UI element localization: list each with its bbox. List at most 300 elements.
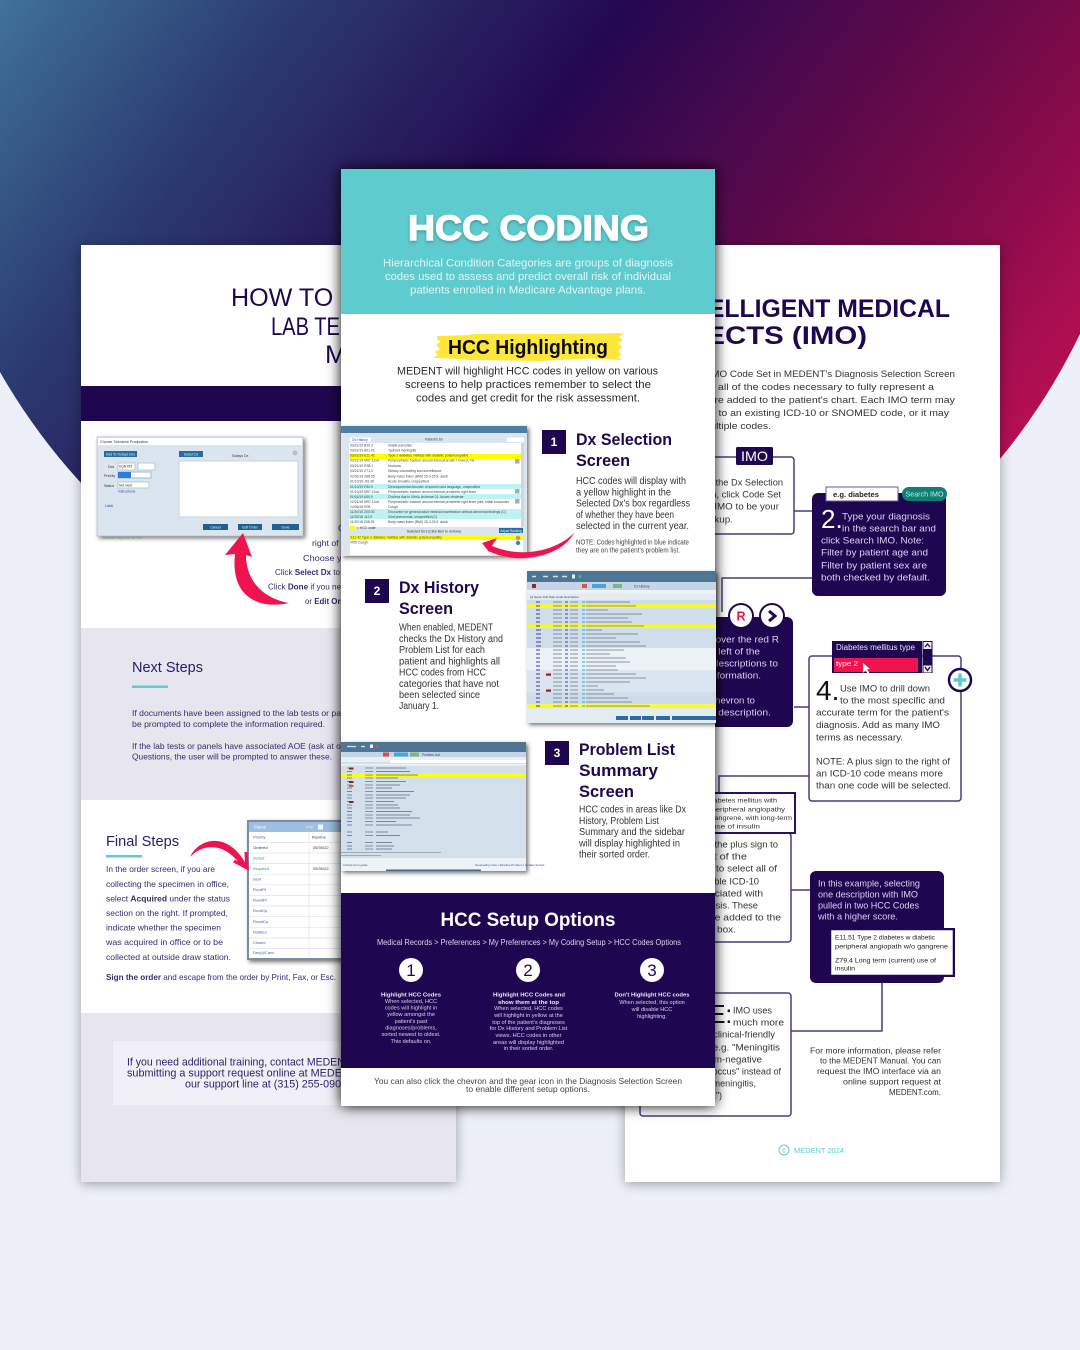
heading: HCC highlighting with yellow brush [433,333,624,361]
example callout: pulled in two HCC Codes [818,900,919,912]
option 1: When selected, HCC [385,999,437,1005]
heading: dx selection screen: Dx Selection [576,431,672,449]
screenshot: diagnosis selection: 01/10/19 J01.90 [350,480,374,484]
note box: NOTE: [660,999,732,1029]
option 1 [381,958,441,1045]
header description [383,258,674,296]
screenshot: order dialog: Done [281,525,290,529]
screenshot: diagnosis selection: Typhoid meningitis [388,448,416,452]
heading: problem list summary screen: Screen [579,783,634,801]
option 3: When selected, this option [619,1000,685,1006]
step number 3: 3 [554,746,561,760]
setup footnote: You can also click the chevron and the gear icon in the Diagnosis Selection Screen [374,1076,682,1086]
heading: dx selection screen [576,431,672,470]
highlighting description [397,366,658,404]
final steps text: collecting the specimen in office, [106,879,229,889]
step 3: description box [640,604,793,727]
step 5: plus sign box: codes will be added to the [661,912,781,924]
screenshot: dx history: [x] Name ICD Date Code Description [530,595,579,599]
option 2: top of the patient's diagnoses [492,1020,565,1026]
title: how to order lab tests [231,284,435,369]
search IMO button: Search IMO [906,492,944,498]
IMO label [736,447,773,465]
dx selection note: NOTE: Codes highlighted in blue indicate [576,540,689,546]
screenshot: status table: Sent [253,876,262,882]
step number 1: 1 [551,435,558,449]
screenshot: order dialog [97,437,303,540]
next steps text [132,708,407,762]
header description: patients enrolled in Medicare Advantage plans. [410,284,646,296]
screenshot: status table: RvwdPt [253,898,268,902]
heading: dx history screen: Dx History [399,579,480,597]
section: HCC setup options [341,893,715,1068]
screenshot: diagnosis selection: = HCC code [357,526,376,530]
screenshot: status table: RcvdPt [253,887,267,892]
HCC code result box: E11.51 Type 2 diabetes w diabetic [835,934,936,942]
option 2: in their sorted order. [504,1046,554,1052]
option 2: will highlight in yellow at the [493,1013,563,1019]
screenshot: status table: Priority [253,834,265,840]
setup footnote [374,1076,682,1094]
screenshot: diagnosis selection: Adjust Ranking [500,529,522,533]
problem list text: their sorted order. [579,850,650,860]
screenshot: order dialog: DQN #15 [119,464,133,468]
dx history text: Problem List for each [399,645,485,656]
heading: problem list summary screen [579,741,675,801]
note box: terms (e.g. "Meningitis [682,1042,780,1054]
problem list text: HCC codes in areas like Dx [579,804,686,816]
screenshot: order dialog: Edit Order [242,525,259,529]
selected description: current use of insulin [684,824,760,830]
screenshot: order dialog: Cancel [210,525,221,529]
screenshot: problem list summary [341,742,545,871]
problem list text: will display highlighted in [578,838,680,850]
screenshot: status table: Status [254,824,266,830]
heading: next steps: Next Steps [132,659,203,676]
next steps text: Questions, the user will be prompted to answer these. [132,752,332,762]
screenshot: dx history [527,571,716,723]
dx selection note [576,540,689,554]
option 1: This defaults on. [390,1039,432,1045]
title: how to order lab tests: MEDENT [325,341,435,369]
screenshot: diagnosis selection: Periprosthetic fracture around internal prosthetic right knee joint, initial encounter [388,500,510,504]
more information text: to the MEDENT Manual. You can [820,1056,941,1066]
screenshot: diagnosis selection: 11/20/18 Z00.00 [350,510,375,514]
screenshot: problem list summary: Generating Care | Resolve Problem | Update Sorted [475,863,545,867]
more information text: MEDENT.com. [889,1088,941,1097]
panel: intelligent medical objects page [625,245,1000,1182]
step 1 text: lookup. [701,514,733,526]
heading: dx history screen [399,579,480,618]
step 1 text: and select IMO to be your [667,502,780,512]
option 1: 1 [406,961,416,980]
option 2: When selected, HCC codes [494,1006,563,1012]
final steps text: section on the right. If prompted, [106,908,228,918]
step 2: search box: both checked by default. [821,572,930,584]
icon: red R: R [736,610,746,624]
dx selection text: a yellow highlight in the [576,488,672,498]
screenshot: status table: Routine [312,834,327,840]
screenshot: diagnosis selection: Body mass index (BMI) 25.0-25.9, adult [388,474,448,478]
screenshot: diagnosis selection: 03/21/19 Z71.3 [350,469,373,473]
screenshot: diagnosis selection: 01/10/19 M97.11xA [350,490,380,494]
navy band [81,386,456,421]
step 3: description box: 3. Hover over the red R [675,634,779,646]
screenshot: order dialog: Instructions [118,490,136,494]
screenshot: status table: 05/30/22 [313,866,329,871]
screenshot: problem list summary: Problem List [422,753,440,757]
step 1: code set box [640,447,794,534]
intro text: Use the IMO Code Set in MEDENT's Diagnosis Selection Screen [672,369,955,380]
screenshot: status table: Dec(t)/Canc [253,950,274,955]
screenshot: diagnosis selection: Patient's Dx [425,438,443,442]
example callout: one description with IMO [818,890,918,900]
screenshot: diagnosis selection: Cholera due to Vibrio cholerae 01, biovar cholerae [388,495,464,499]
heading: setup options: HCC Setup Options [440,909,616,931]
final steps text: was acquired in office or to be [105,937,223,947]
instructions text fragment: Click Done if you need to [268,582,359,592]
dx selection text: selected in the current year. [576,521,689,532]
heading: final steps: Final Steps [106,833,179,850]
screenshot: order dialog: Add To Todays Dxs [106,452,135,456]
selected description: Type 2 diabetes mellitus with [684,798,777,804]
section: next steps [81,628,456,800]
step 5: plus sign box: the right of the [677,852,747,862]
step 5: plus sign box: the diagnosis. These [672,900,758,912]
arrow: to selected dx row [482,533,574,558]
option 2: areas will display highlighted [493,1040,564,1046]
copyright footer: c [782,1148,786,1154]
instructions text fragment: Click Select Dx to add. [275,567,358,577]
screenshot: diagnosis selection: R05 Cough [350,540,368,544]
dx history text: January 1. [399,701,439,712]
step 4: drill down box: Use IMO to drill down [840,684,930,694]
highlighting description: screens to help practices remember to select the [405,379,651,391]
screenshot: diagnosis selection: 12/21/18 M97.11xA [350,500,380,504]
title: intelligent medical objects: INTELLIGENT MEDICAL [668,295,950,323]
screenshot: order dialog: Lab# [105,504,113,508]
option 1: patient's past [395,1019,428,1025]
example callout: with a higher score. [817,912,898,922]
menu path: Medical Records > Preferences > My Preferences > My Coding Setup > HCC Codes Options [377,938,681,947]
screenshot: order dialog: Choose Dept for Int TIG [102,536,142,540]
intro text: match to an existing ICD-10 or SNOMED code, or it may [687,408,949,419]
connector lines [719,511,882,1031]
note box: due to gram-negative [670,1054,762,1066]
instructions text fragment: right of the screen. [312,538,384,548]
copyright footer [779,1145,844,1155]
arrow: pointing to dialog buttons [225,533,289,605]
dx history text [399,622,503,712]
screenshot: diagnosis selection: Cough [388,505,398,509]
title: intelligent medical objects [645,295,950,350]
note box: diplococcus" instead of [689,1066,781,1078]
screenshot: diagnosis selection: Periprosthetic fracture around internal prosthetic right knee [388,490,476,494]
option 1: sorted newest to oldest. [381,1032,441,1038]
dx history text: checks the Dx History and [399,634,503,645]
example callout: In this example, selecting [818,878,920,890]
option 3: will disable HCC [631,1007,672,1013]
step 4: drill down box: diagnosis. Add as many IMO [816,720,940,731]
highlighting description: codes and get credit for the risk assessment. [416,392,640,404]
screenshot: diagnosis selection: 03/21/19 B19.2 [350,444,373,448]
screenshot: status table: Ordered [253,845,268,850]
more information text [810,1046,942,1097]
screenshot: diagnosis selection: Dietary counseling and surveillance [388,469,441,473]
selected description [640,793,795,833]
screenshot: order dialog: Dxs [108,465,114,469]
step number 2 [365,579,389,603]
dropdown: diabetes mellitus type [832,641,932,674]
final steps text: In the order screen, if you are [106,864,215,874]
step number 3 [545,741,569,765]
selected description: diabetic peripheral angiopathy [683,806,786,814]
option 2 [490,958,568,1052]
step 4: drill down box: an ICD-10 code means more [816,768,943,780]
note box: more clinical-friendly [689,1030,775,1040]
header description: codes used to assess and predict overall risk of individual [385,271,671,283]
screenshot: diagnosis selection: 11/20/18 J12.9 [350,515,372,519]
next steps text: If the lab tests or panels have associated AOE (ask at order entry) [132,741,380,751]
problem list text: Summary and the sidebar [579,827,686,838]
setup footnote: to enable different setup options. [466,1084,590,1094]
screenshot: diagnosis selection: Developmental disorder of speech and language, unspecified [388,485,480,489]
screenshot: diagnosis selection: 03/21/19 R35.1 [350,464,373,468]
step 2: search box [812,487,947,596]
problem list text: History, Problem List [579,816,659,827]
copyright footer: MEDENT 2024 [794,1146,844,1155]
heading: dx selection screen: Screen [576,452,630,470]
screenshot: status table: Acquired [253,866,269,871]
option 2: 2 [523,961,533,980]
screenshot: diagnosis selection: 12/06/18 R05 [350,505,370,509]
note box: much more [733,1018,784,1028]
screenshot: order dialog: Select Dx [184,452,199,456]
final steps text: indicate whether the specimen [106,922,221,932]
screenshot: diagnosis selection: 03/21/19 M97.11xA [350,459,380,463]
screenshot: status table: RcvdCp [253,908,268,913]
dropdown: diabetes mellitus type: type 2 [836,659,858,668]
dx selection text: of whether they have been [576,510,674,521]
instructions text fragment [268,523,384,606]
panel: lab test ordering page [81,245,456,1182]
step 5: plus sign box: the applicable ICD-10 [669,876,759,888]
step 3: description box: Click chevron to [687,696,755,706]
arrow: pointing to acquired status [190,841,247,868]
screenshot: diagnosis selection: 11/20/18 Z68.25 [350,520,375,524]
dx history text: HCC codes from HCC [399,668,486,678]
icon: plus sign [949,669,971,691]
header description: Hierarchical Condition Categories are groups of diagnosis [383,258,674,270]
screenshot: diagnosis selection: 01/01/19 A00.0 [350,495,373,499]
option 1: diagnoses/problems, [385,1026,437,1032]
option 3 [614,958,690,1020]
more information text: request the IMO interface via an [817,1067,941,1076]
option 3: highlighting. [637,1014,667,1020]
screenshot: order dialog: Todays Dx [232,454,249,458]
heading: problem list summary screen: Summary [579,762,659,780]
screenshot: diagnosis selection: 03/21/19 E11.42 [350,454,375,458]
step 2: search box: Type your diagnosis [842,512,930,522]
screenshot: diagnosis selection: Nocturia [388,464,401,468]
step 4: drill down box: accurate term for the patient's [816,708,949,718]
heading: problem list summary screen: Problem List [579,741,675,759]
screenshot: order dialog: Priority [104,474,115,478]
screenshot: status table: Notified [253,930,267,934]
option 3: Don't Highlight HCC codes [614,992,690,998]
step number 1 [542,430,566,454]
dx history text: patient and highlights all [399,656,500,668]
screenshot: dx history: Dx History [634,584,650,588]
step number 2: 2 [374,584,381,598]
screenshot: diagnosis selection: Dx History [352,438,368,442]
step 4: drill down box: 4. [816,675,839,706]
search input: e.g. diabetes [833,490,879,499]
contact text: If you need additional training, contact MEDENT by [127,1056,365,1068]
intro text [649,369,955,432]
title: how to order lab tests: LAB TESTS [271,313,379,341]
step 2: search box: Filter by patient sex are [821,560,927,572]
final steps text: Sign the order and escape from the order by Print, Fax, or Esc. [106,972,336,982]
next steps text: be prompted to complete the information required. [132,719,325,729]
problem list text [578,804,686,860]
heading: HCC highlighting with yellow brush: HCC Highlighting [448,337,608,359]
dropdown: diabetes mellitus type: Diabetes mellitus type [836,643,915,652]
screenshot: diagnosis selection: Selected Dx's (Click item to remove) [407,530,461,534]
screenshot: order dialog: Choose Tolerance Prodpoition [100,440,148,444]
screenshot: diagnosis selection: Type 2 diabetes mellitus with diabetic polyneuropathy [388,454,468,458]
section: final steps [105,821,368,982]
final steps text: select Acquired under the status [106,894,230,904]
screenshot: order dialog: Status [104,484,114,488]
dx history text: categories that have not [399,679,499,690]
option 1: Highlight HCC Codes [381,992,441,998]
more information text: online support request at [843,1078,942,1086]
step 5: plus sign box: Selected Dx box. [660,924,736,936]
section: additional training [81,1013,456,1182]
dx selection text: HCC codes will display with [576,476,686,487]
step 4: drill down box: NOTE: A plus sign to the right of [816,756,950,768]
instructions text fragment: Check [338,523,365,533]
HCC code result box: peripheral angiopath w/o gangrene [835,944,948,950]
note box: "Meningococcal meningitis, [646,1078,756,1090]
note box: IMO uses [733,1006,772,1016]
note box: unspecified.") [670,1090,722,1102]
HCC code result box: Z79.4 Long term (current) use of [835,958,936,964]
step 2: search box: Filter by patient age and [821,548,928,558]
step 3: description box: to the left of the [690,646,760,658]
title: intelligent medical objects: OBJECTS (IMO) [645,322,867,350]
screenshot: diagnosis selection: Body mass index (BMI) 25.0-25.9, adult [388,520,448,524]
panel: HCC coding center page [341,169,716,1106]
step 5: plus sign box: description to select all of [665,864,777,874]
final steps text [105,864,336,982]
screenshot: diagnosis selection: Encounter for general adult medical examination without abnormal findings (C) [388,510,506,514]
step 5: plus sign box [640,793,795,942]
IMO label: IMO [741,448,768,464]
step 2: search box: in the search bar and [842,524,936,534]
dx selection note: they are on the patient's problem list. [576,548,680,554]
step 2: search box: click Search IMO. Note: [821,536,924,546]
screenshot: diagnosis selection: E11.42 Type 2 diabetes mellitus with diabetic polyneuropathy [350,536,442,540]
note box [640,993,791,1116]
next steps text: If documents have been assigned to the lab tests or panels, the user will [132,708,407,718]
more information text: For more information, please refer [810,1046,941,1056]
step 2: search box: 2. [821,504,843,534]
intro text: map to multiple codes. [667,421,771,432]
screenshot: diagnosis selection: Periprosthetic fracture around internal prosth r knee jt, init [388,459,474,463]
screenshot: diagnosis selection: 03/21/19 A01.01 [350,448,375,452]
step 1 text: 1. In the Dx Selection [695,478,783,488]
screenshot: status table: Pnb [306,824,314,830]
screenshot: diagnosis selection: Acute sinusitis, unspecified [388,480,429,484]
final steps text: collected at outside draw station. [106,952,231,962]
step 5: plus sign box: 5. Click the plus sign to [681,840,778,850]
title: HCC CODING [408,209,649,248]
screenshot: diagnosis selection: 01/10/19 F80.9 [350,485,373,489]
step 4: drill down box: terms as necessary. [816,732,903,744]
screenshot: diagnosis selection: Viral pneumonia, unspecified (C) [388,515,437,519]
screenshot: status table: Sched [253,856,264,860]
contact text [127,1056,425,1090]
selected description: with gangrene, with long-term [694,815,793,822]
step 4: drill down box: than one code will be selected. [816,780,951,792]
option 2: views. HCC codes in other [496,1033,562,1039]
instructions text fragment: Choose your tests. [303,553,379,563]
dx history text: been selected since [399,690,481,701]
intro text: to ensure that all of the codes necessary to fully represent a [649,382,935,393]
screenshot: status table [248,821,368,959]
screenshot: diagnosis selection [341,426,527,556]
dx selection text [576,476,690,532]
step 3: description box: see more information. [665,670,761,682]
contact text: submitting a support request online at MEDENT.com or calling [127,1068,425,1080]
screenshot: order dialog: Not Sent [119,484,132,488]
screenshot: status table: Closed [253,940,265,945]
contact text: our support line at (315) 255-0900. [185,1078,350,1090]
example callout [810,871,955,983]
step 3: description box: select the description. [671,708,771,718]
step 1 text [667,478,783,526]
step 4: drill down box: to the most specific and [840,696,945,706]
title: how to order lab tests: HOW TO ORDER [231,284,431,312]
screenshot: status table: RvwdCp [253,919,269,924]
screenshot: diagnosis selection: 02/01/19 Z68.25 [350,474,375,478]
highlighting description: MEDENT will highlight HCC codes in yellow on various [397,366,658,378]
step 5: plus sign box: codes associated with [663,888,763,900]
HCC code result box: insulin [835,966,855,972]
option 2: Highlight HCC Codes and [493,992,565,998]
option 1: yellow amongst the [387,1012,435,1018]
option 1: codes will highlight in [385,1006,437,1012]
header: teal [341,169,715,314]
intro text: diagnoses are added to the patient's chart. Each IMO term may [657,395,955,406]
HCC code result box [831,928,955,977]
option 2: for Dx History and Problem List [490,1026,568,1032]
dx selection text: Selected Dx's box regardless [576,498,690,510]
option 3: 3 [647,961,657,980]
option 2: show them at the top [498,1000,559,1006]
screenshot: diagnosis selection: Viable parvotsis [388,444,412,448]
step 1 text: Screen, click Code Set [687,490,781,500]
step 4: drill down box [809,641,971,801]
step 3: description box: ICD-10 descriptions to [678,658,778,670]
heading: dx history screen: Screen [399,600,453,618]
screenshot: problem list summary: Include from guide [343,863,368,867]
instructions text fragment: or Edit Order. [305,596,355,606]
dx history text: When enabled, MEDENT [399,622,493,634]
screenshot: status table: 05/30/22 [313,845,329,850]
